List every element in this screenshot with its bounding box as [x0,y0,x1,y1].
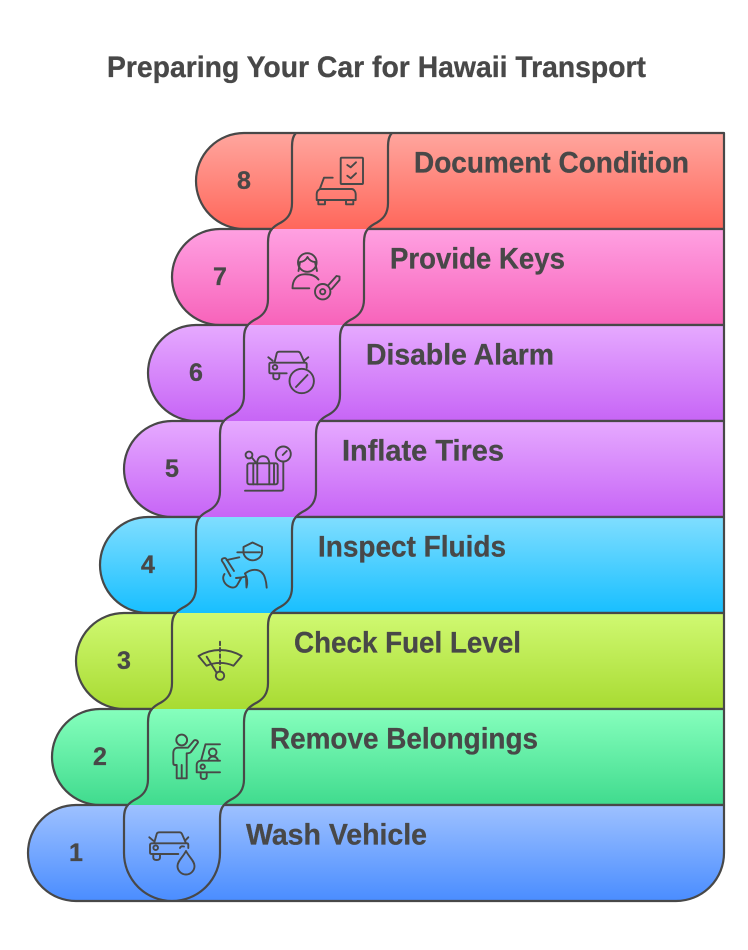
icon: person beside car [173,735,220,779]
step number 3: 3 [117,647,131,675]
step number 1: 1 [69,839,83,867]
step number 4: 4 [141,551,155,579]
band 4: Inspect Fluids [100,517,724,613]
label: Disable Alarm: Disable Alarm [366,338,554,372]
icon: car with water drop [149,832,194,874]
step number 6: 6 [189,359,203,387]
step number 7: 7 [213,263,227,291]
title: Preparing Your Car for Hawaii Transport [107,51,646,84]
label: Document Condition: Document Condition [414,146,689,180]
band 5: Inflate Tires [124,421,724,517]
band 7: Provide Keys [172,229,724,325]
band 2: Remove Belongings [52,709,724,805]
icon: car with checklist [317,158,363,204]
icon: car with prohibition sign [268,352,314,393]
icon: tire pressure gauge with luggage [245,446,291,491]
label: Provide Keys: Provide Keys [390,242,565,276]
band 8: Document Condition [196,133,724,229]
band 1: Wash Vehicle [28,805,724,901]
icon: person with key [292,253,340,299]
step number 8: 8 [237,167,251,195]
label: Inflate Tires: Inflate Tires [342,434,504,468]
band 3: Check Fuel Level [76,613,724,709]
label: Inspect Fluids: Inspect Fluids [318,530,506,564]
icon: mechanic with dipstick [222,542,267,588]
label: Check Fuel Level: Check Fuel Level [294,626,521,660]
step number 5: 5 [165,455,179,483]
label: Remove Belongings: Remove Belongings [270,722,538,756]
step number 2: 2 [93,743,107,771]
icon: fuel gauge [198,642,242,680]
label: Wash Vehicle: Wash Vehicle [246,818,427,852]
band 6: Disable Alarm [148,325,724,421]
